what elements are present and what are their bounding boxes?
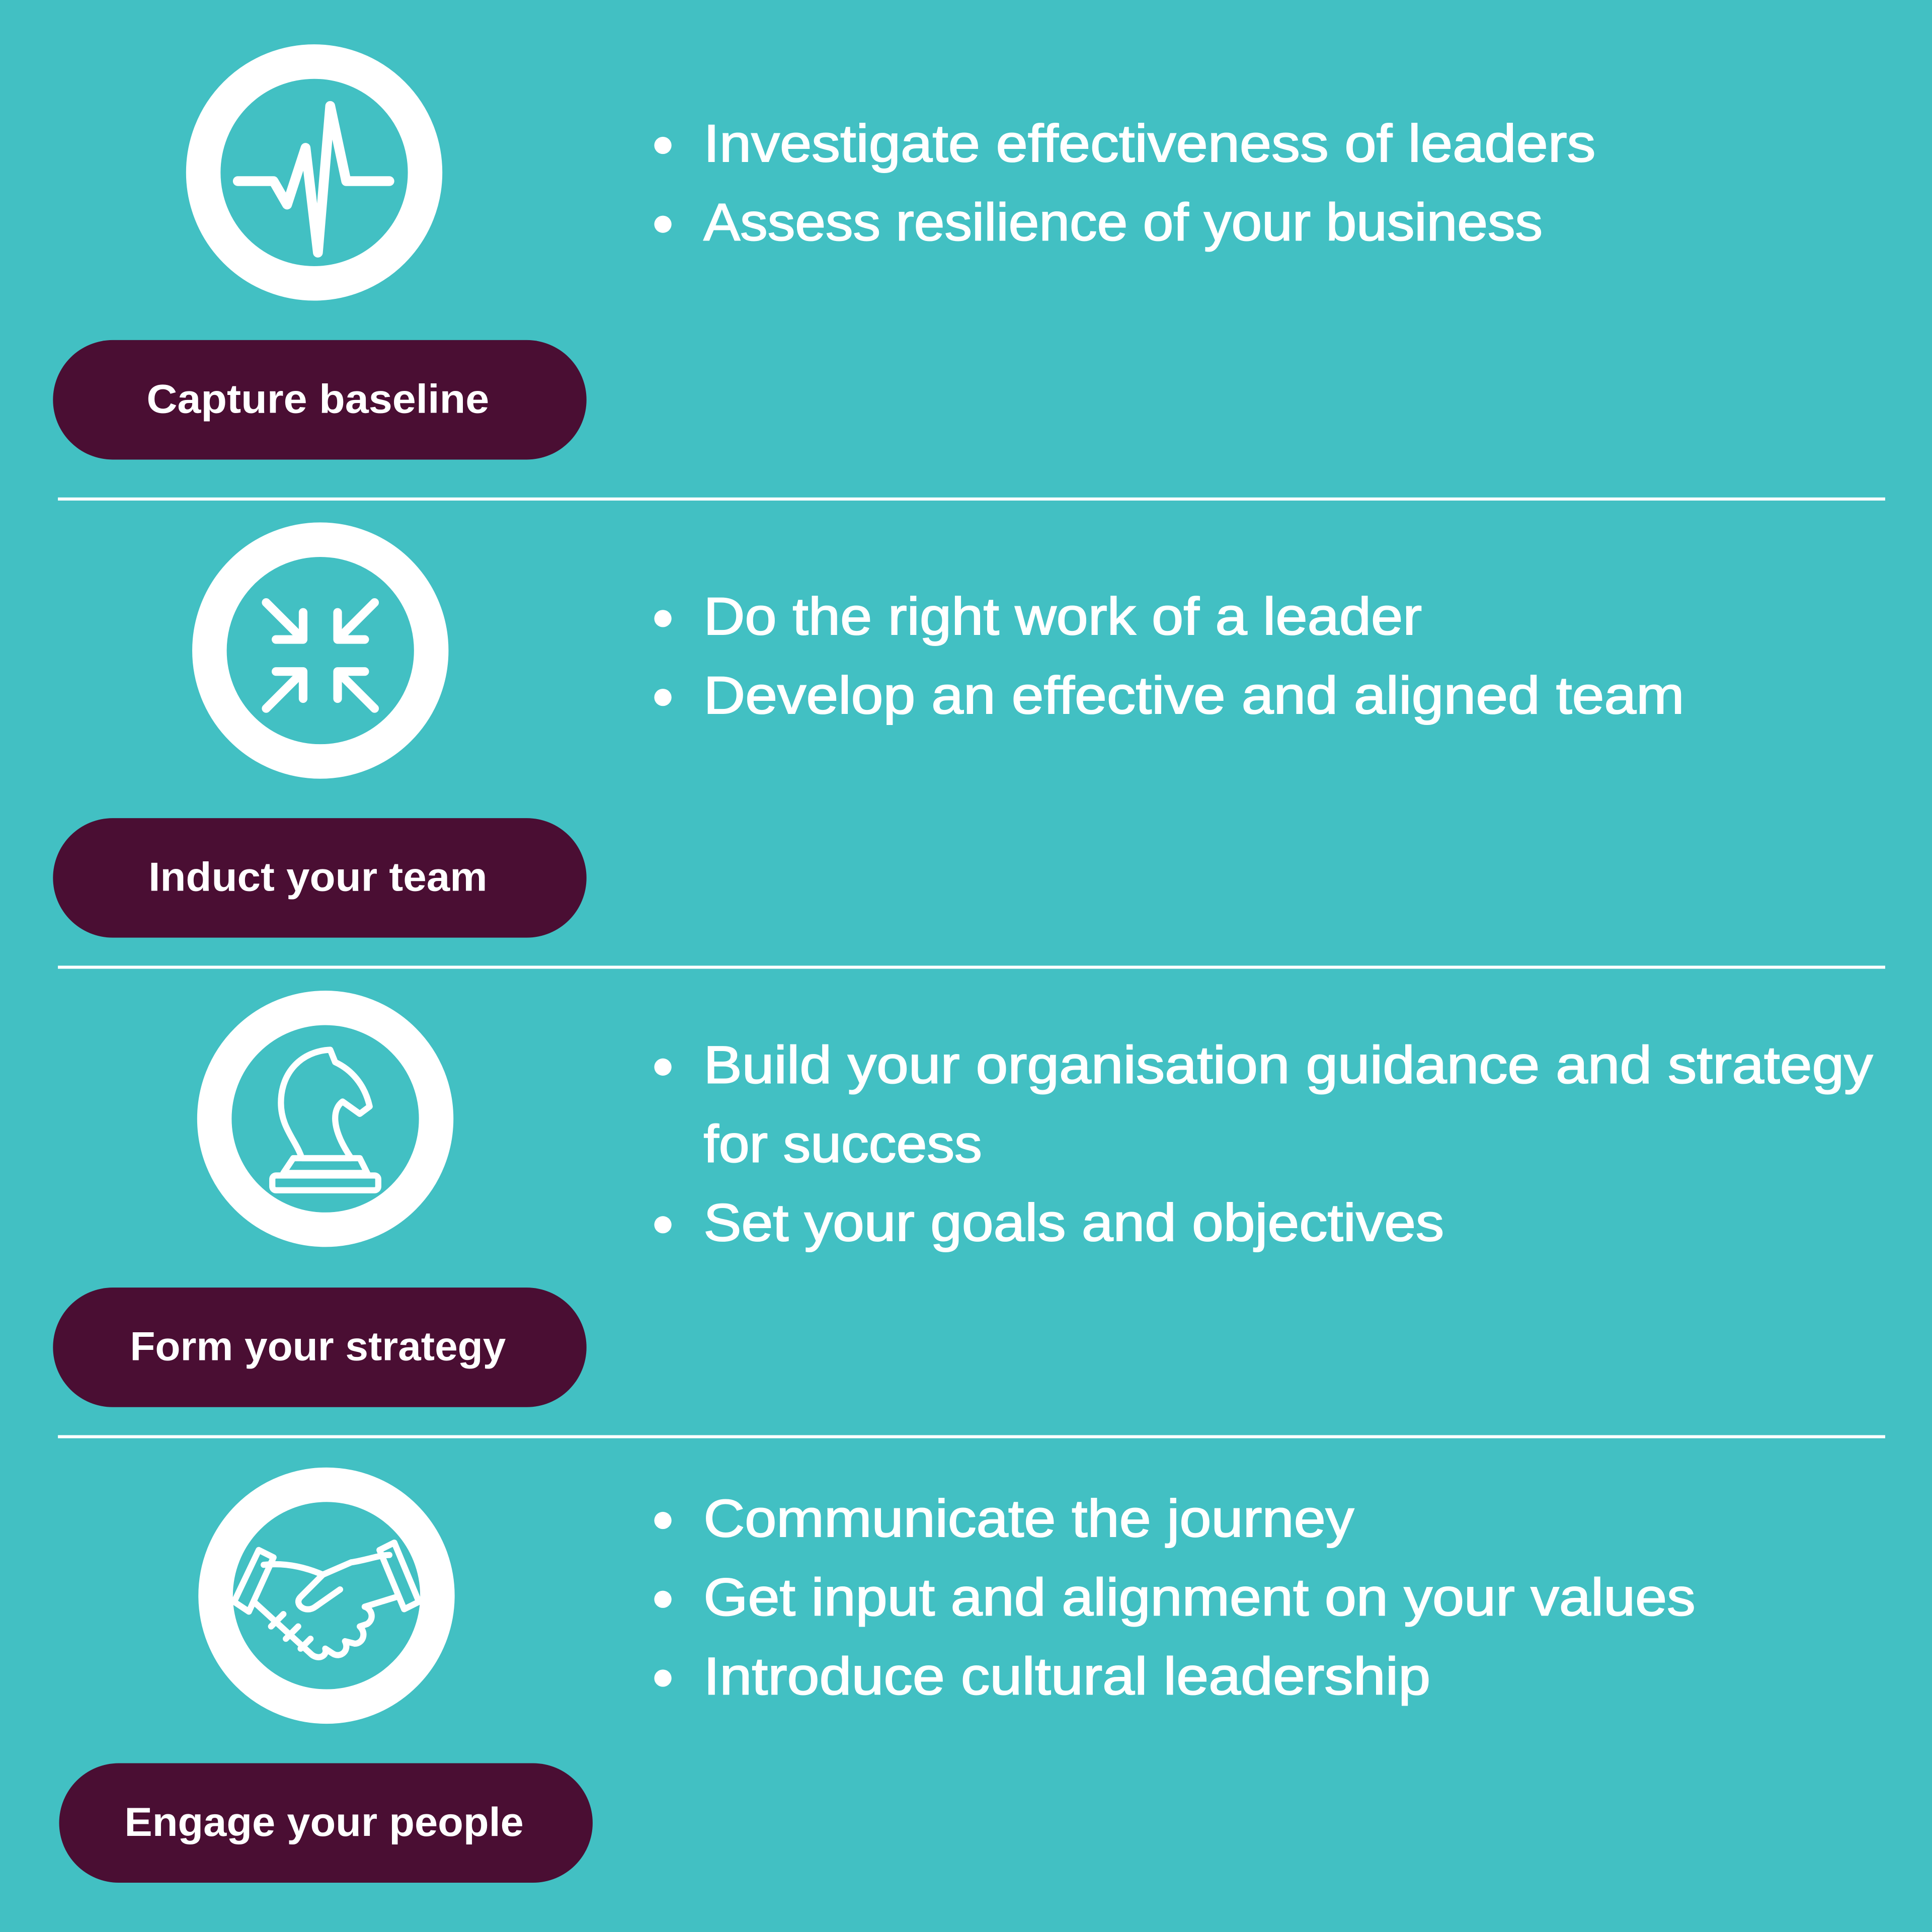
pill: Form your strategy: Form your strategy <box>130 1324 506 1370</box>
bullets: row 3 <box>654 1036 1873 1252</box>
pill: Induct your team <box>53 818 587 938</box>
pill: Engage your people: Engage your people <box>124 1800 524 1845</box>
bullets: row 4: Communicate the journey <box>703 1489 1354 1548</box>
bullets: row 1: Investigate effectiveness of leaders <box>703 114 1595 173</box>
pill: Engage your people <box>59 1763 593 1883</box>
icon: heartbeat <box>203 61 425 283</box>
pill: Induct your team: Induct your team <box>148 855 488 900</box>
bullets: row 2 <box>654 587 1684 725</box>
bullets: row 4 <box>654 1489 1696 1706</box>
pill: Form your strategy <box>53 1287 587 1407</box>
bullets: row 2: Develop an effective and aligned team <box>703 666 1684 725</box>
bullets: row 4: Introduce cultural leadership <box>703 1647 1430 1706</box>
bullets: row 1: Assess resilience of your business <box>703 193 1543 252</box>
pill: Capture baseline: Capture baseline <box>146 376 489 422</box>
bullets: row 4: Get input and alignment on your values <box>703 1568 1696 1627</box>
bullets: row 1 <box>654 114 1595 252</box>
bullets: row 2: Do the right work of a leader <box>703 587 1422 646</box>
bullets: row 3: Build your organisation guidance and strategy <box>703 1036 1873 1095</box>
icon: arrows inward <box>209 540 431 761</box>
bullets: row 3: for success <box>703 1114 982 1173</box>
pill: Capture baseline <box>53 340 587 459</box>
icon: handshake <box>216 1485 437 1707</box>
icon: chess knight <box>214 1008 436 1230</box>
bullets: row 3: Set your goals and objectives <box>703 1193 1444 1252</box>
